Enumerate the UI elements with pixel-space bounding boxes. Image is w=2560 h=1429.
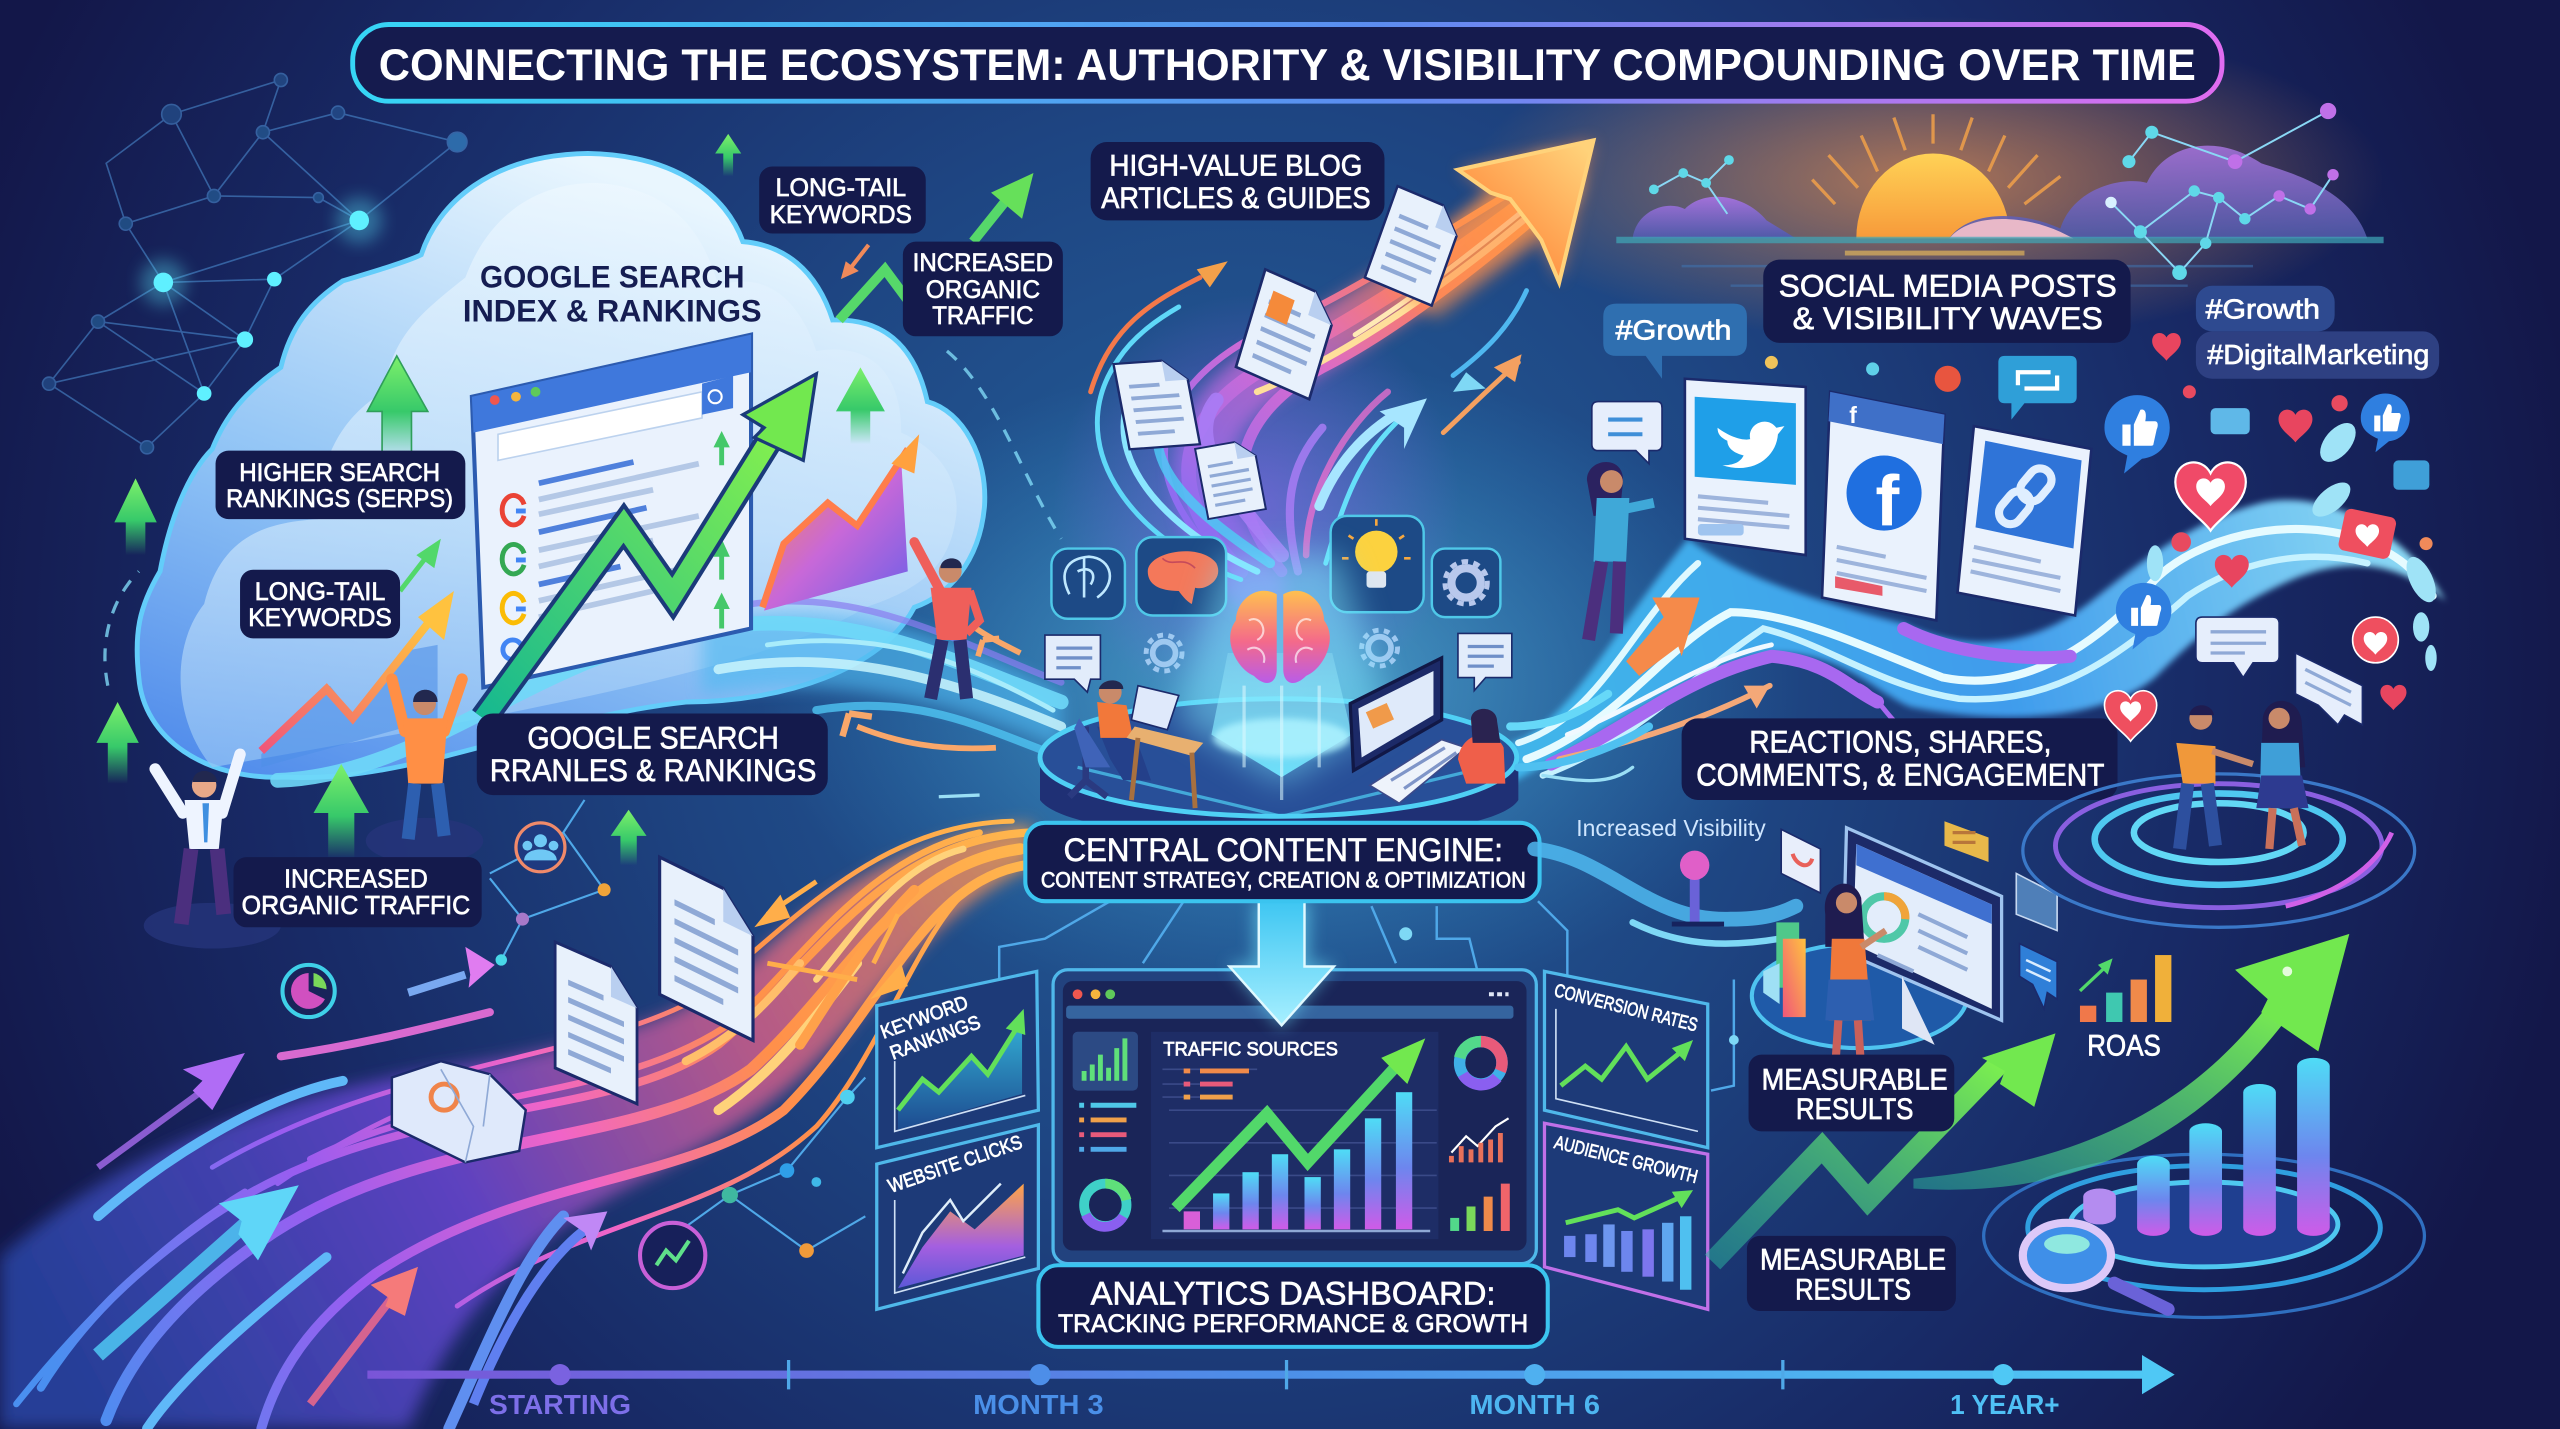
connector dots (1399, 927, 1739, 1045)
label: measurable results upper: RESULTS (1796, 1093, 1913, 1126)
ribbons left of centre (278, 601, 1061, 780)
roas mini bars (2080, 955, 2171, 1022)
icon: brain outline (1051, 549, 1125, 619)
label: central content engine: CONTENT STRATEGY, CREATION & OPTIMIZATION (1041, 867, 1526, 892)
timeline (367, 1355, 2175, 1420)
social card: facebook (1822, 392, 1944, 620)
flow arrows (98, 882, 908, 1404)
chat near couple (2104, 617, 2362, 741)
heading: google search index: GOOGLE SEARCH (480, 259, 745, 294)
social card: twitter (1685, 379, 1806, 555)
donut left (1084, 1184, 1127, 1227)
donut right (1460, 1042, 1502, 1085)
label: social media posts (1763, 260, 2131, 343)
icon: orange brain (1136, 537, 1226, 615)
person: couple shaking hands (2176, 701, 2309, 849)
label: high-value blog articles & guides: ARTICLES & GUIDES (1101, 182, 1371, 215)
label: reactions shares comments (1682, 718, 2118, 800)
person: man with raised arms (144, 754, 281, 949)
label: measurable results lower: MEASURABLE (1760, 1243, 1946, 1276)
analyst at monitor (1752, 828, 2002, 1069)
zigzag green arrow (1713, 1033, 2055, 1262)
label: central content engine (1025, 823, 1540, 901)
hashtag digital marketing (2196, 331, 2439, 379)
label: increased organic traffic upper: TRAFFIC (932, 302, 1033, 330)
label: increased organic traffic lower: ORGANIC TRAFFIC (242, 890, 470, 920)
ribbon to analyst (1535, 849, 1796, 944)
panel: audience growth (1544, 1123, 1708, 1309)
dashed connector left (105, 351, 1061, 686)
visibility wave (1510, 500, 2446, 784)
glow behind sun (1469, 16, 2384, 343)
text: increased visibility: Increased Visibility (1576, 815, 1766, 841)
big green rising arrow (483, 374, 816, 718)
map pin (1672, 851, 1724, 924)
person: woman with phone (1587, 462, 1654, 640)
person: orange shirt man (366, 679, 483, 864)
bottom-left flow ribbon (0, 821, 1032, 1429)
document sheets on the flow (555, 857, 753, 1104)
panel: website clicks (877, 1125, 1038, 1309)
icon: people badge (516, 823, 565, 872)
sun and horizon (1616, 114, 2384, 286)
title (353, 24, 2222, 101)
timeline label: month 3: MONTH 3 (973, 1389, 1104, 1420)
icon: left gear (1146, 635, 1182, 671)
social card: facebook: f (1849, 402, 1857, 428)
label: long-tail keywords lower: KEYWORDS (248, 604, 392, 632)
reaction icons (1765, 333, 2442, 710)
label: long-tail keywords lower (240, 570, 400, 638)
network graph right (1649, 103, 2339, 280)
label: google search rranles & rankings: GOOGLE SEARCH (527, 721, 779, 756)
label: social media posts: & VISIBILITY WAVES (1793, 301, 2103, 336)
heading: google search index: INDEX & RANKINGS (463, 294, 762, 329)
label: central content engine: CENTRAL CONTENT ENGINE: (1064, 831, 1503, 868)
lower left orange chart (261, 539, 454, 767)
text: website clicks: WEBSITE CLICKS (885, 1131, 1025, 1198)
label: analytics dashboard: ANALYTICS DASHBOARD: (1091, 1274, 1496, 1311)
icon: left chat (1045, 635, 1100, 692)
floating analyst icons (1781, 821, 2057, 1009)
label: increased organic traffic upper: INCREASED (913, 249, 1053, 277)
label: increased organic traffic lower (234, 857, 482, 927)
list rows (1079, 1105, 1136, 1149)
icon: gear box (1432, 549, 1500, 617)
timeline label: 1 year: 1 YEAR+ (1950, 1389, 2060, 1420)
hashtag tag right (2196, 286, 2335, 331)
hashtag digital marketing: #DigitalMarketing (2207, 339, 2429, 370)
small sky arrows (1091, 261, 1527, 506)
label: long-tail keywords upper: KEYWORDS (770, 201, 912, 229)
timeline label: starting: STARTING (489, 1389, 631, 1420)
label: google search rranles & rankings: RRANLES & RANKINGS (490, 753, 816, 788)
label: long-tail keywords lower: LONG-TAIL (255, 578, 385, 606)
label: long-tail keywords upper (759, 167, 926, 233)
text: traffic sources: TRAFFIC SOURCES (1163, 1038, 1338, 1060)
network lines lower left (490, 800, 865, 1258)
label: measurable results upper: MEASURABLE (1762, 1064, 1948, 1097)
network graph left (43, 73, 467, 454)
browser window search results (472, 335, 751, 687)
label: measurable results lower: RESULTS (1795, 1274, 1911, 1307)
crumpled paper (392, 1061, 526, 1162)
long curved green arrow (1913, 934, 2349, 1190)
social card: facebook: f (1875, 462, 1900, 542)
icon: central brain (1230, 591, 1330, 683)
content engine platform (1040, 555, 1518, 839)
mini bar chart (1073, 1032, 1138, 1091)
hashtag tag right: #Growth (2206, 293, 2320, 324)
label: increased organic traffic upper: ORGANIC (926, 276, 1040, 304)
chat bubbles social (1592, 356, 2077, 464)
label: increased organic traffic upper (903, 242, 1063, 336)
label: google search rranles & rankings (477, 713, 828, 795)
icon: pie chart badge (282, 965, 335, 1017)
label: measurable results lower (1747, 1236, 1956, 1311)
central icons (1045, 516, 1512, 692)
label: increased organic traffic lower: INCREASED (284, 863, 428, 893)
upward green arrows (96, 134, 885, 865)
glow behind centre (759, 359, 1804, 1012)
label: high-value blog articles & guides (1091, 142, 1384, 220)
centre swirl (1053, 183, 1559, 718)
panel: conversion rates (1544, 971, 1708, 1148)
title: CONNECTING THE ECOSYSTEM: AUTHORITY & VISIBILITY COMPOUNDING OVER TIME (379, 39, 2196, 90)
label: higher search rankings: HIGHER SEARCH (239, 459, 440, 487)
panel: keyword rankings (877, 971, 1038, 1148)
label: higher search rankings (216, 451, 465, 519)
text: keyword rankings: RANKINGS (887, 1012, 984, 1065)
text: audience growth: AUDIENCE GROWTH (1552, 1131, 1700, 1187)
label: analytics dashboard: TRACKING PERFORMANCE & GROWTH (1058, 1310, 1528, 1338)
text: keyword rankings: KEYWORD (878, 992, 971, 1044)
ribbons right of platform (1510, 694, 1649, 781)
small orange chart (762, 434, 919, 611)
orange arrow by wave (1626, 598, 1700, 676)
small bars (1455, 1184, 1505, 1231)
label: reactions shares comments: COMMENTS, & ENGAGEMENT (1696, 757, 2105, 792)
label: social media posts: SOCIAL MEDIA POSTS (1779, 268, 2117, 303)
social card: link (1958, 426, 2091, 615)
label: measurable results upper (1749, 1055, 1954, 1131)
icon: magnifier (2023, 1223, 2168, 1309)
hashtag bubble left (1603, 304, 1747, 379)
ripples under couple (2023, 774, 2415, 927)
text: roas: ROAS (2087, 1029, 2161, 1062)
cloud: google search index (137, 153, 985, 778)
small line chart (1451, 1118, 1509, 1162)
person at computer right (1350, 658, 1505, 803)
icon: chart badge (640, 1223, 705, 1288)
orange arrows toward centre (842, 629, 1020, 748)
heading: google search index (463, 259, 762, 329)
label: high-value blog articles & guides: HIGH-VALUE BLOG (1109, 150, 1362, 183)
icon: light bulb (1331, 516, 1424, 612)
big orange arrow head (1388, 140, 1593, 318)
icon: right chat (1458, 633, 1512, 691)
label: long-tail keywords upper: LONG-TAIL (776, 174, 906, 202)
bars with ripples (1984, 1058, 2424, 1317)
network bright nodes (140, 198, 382, 401)
hashtag bubble left: #Growth (1615, 315, 1731, 346)
label: analytics dashboard (1038, 1265, 1548, 1347)
text: conversion rates: CONVERSION RATES (1552, 979, 1700, 1035)
down arrow to dashboard (1228, 901, 1336, 1029)
label: reactions shares comments: REACTIONS, SHARES, (1749, 725, 2051, 760)
panel: analytics dashboard (1053, 970, 1536, 1264)
timeline label: month 6: MONTH 6 (1469, 1389, 1600, 1420)
text: keyword rankings (878, 990, 984, 1065)
label: higher search rankings: RANKINGS (SERPS) (226, 485, 453, 513)
main chart panel (1151, 1032, 1438, 1239)
person at desk left (1069, 680, 1203, 808)
icon: right gear (1362, 630, 1398, 666)
documents above the engine (1113, 186, 1464, 519)
dots line near platform (939, 795, 980, 797)
green arrow top right of cloud (839, 173, 1033, 320)
circuit lines (999, 901, 1734, 1091)
person: red shirt pointing (914, 542, 980, 699)
